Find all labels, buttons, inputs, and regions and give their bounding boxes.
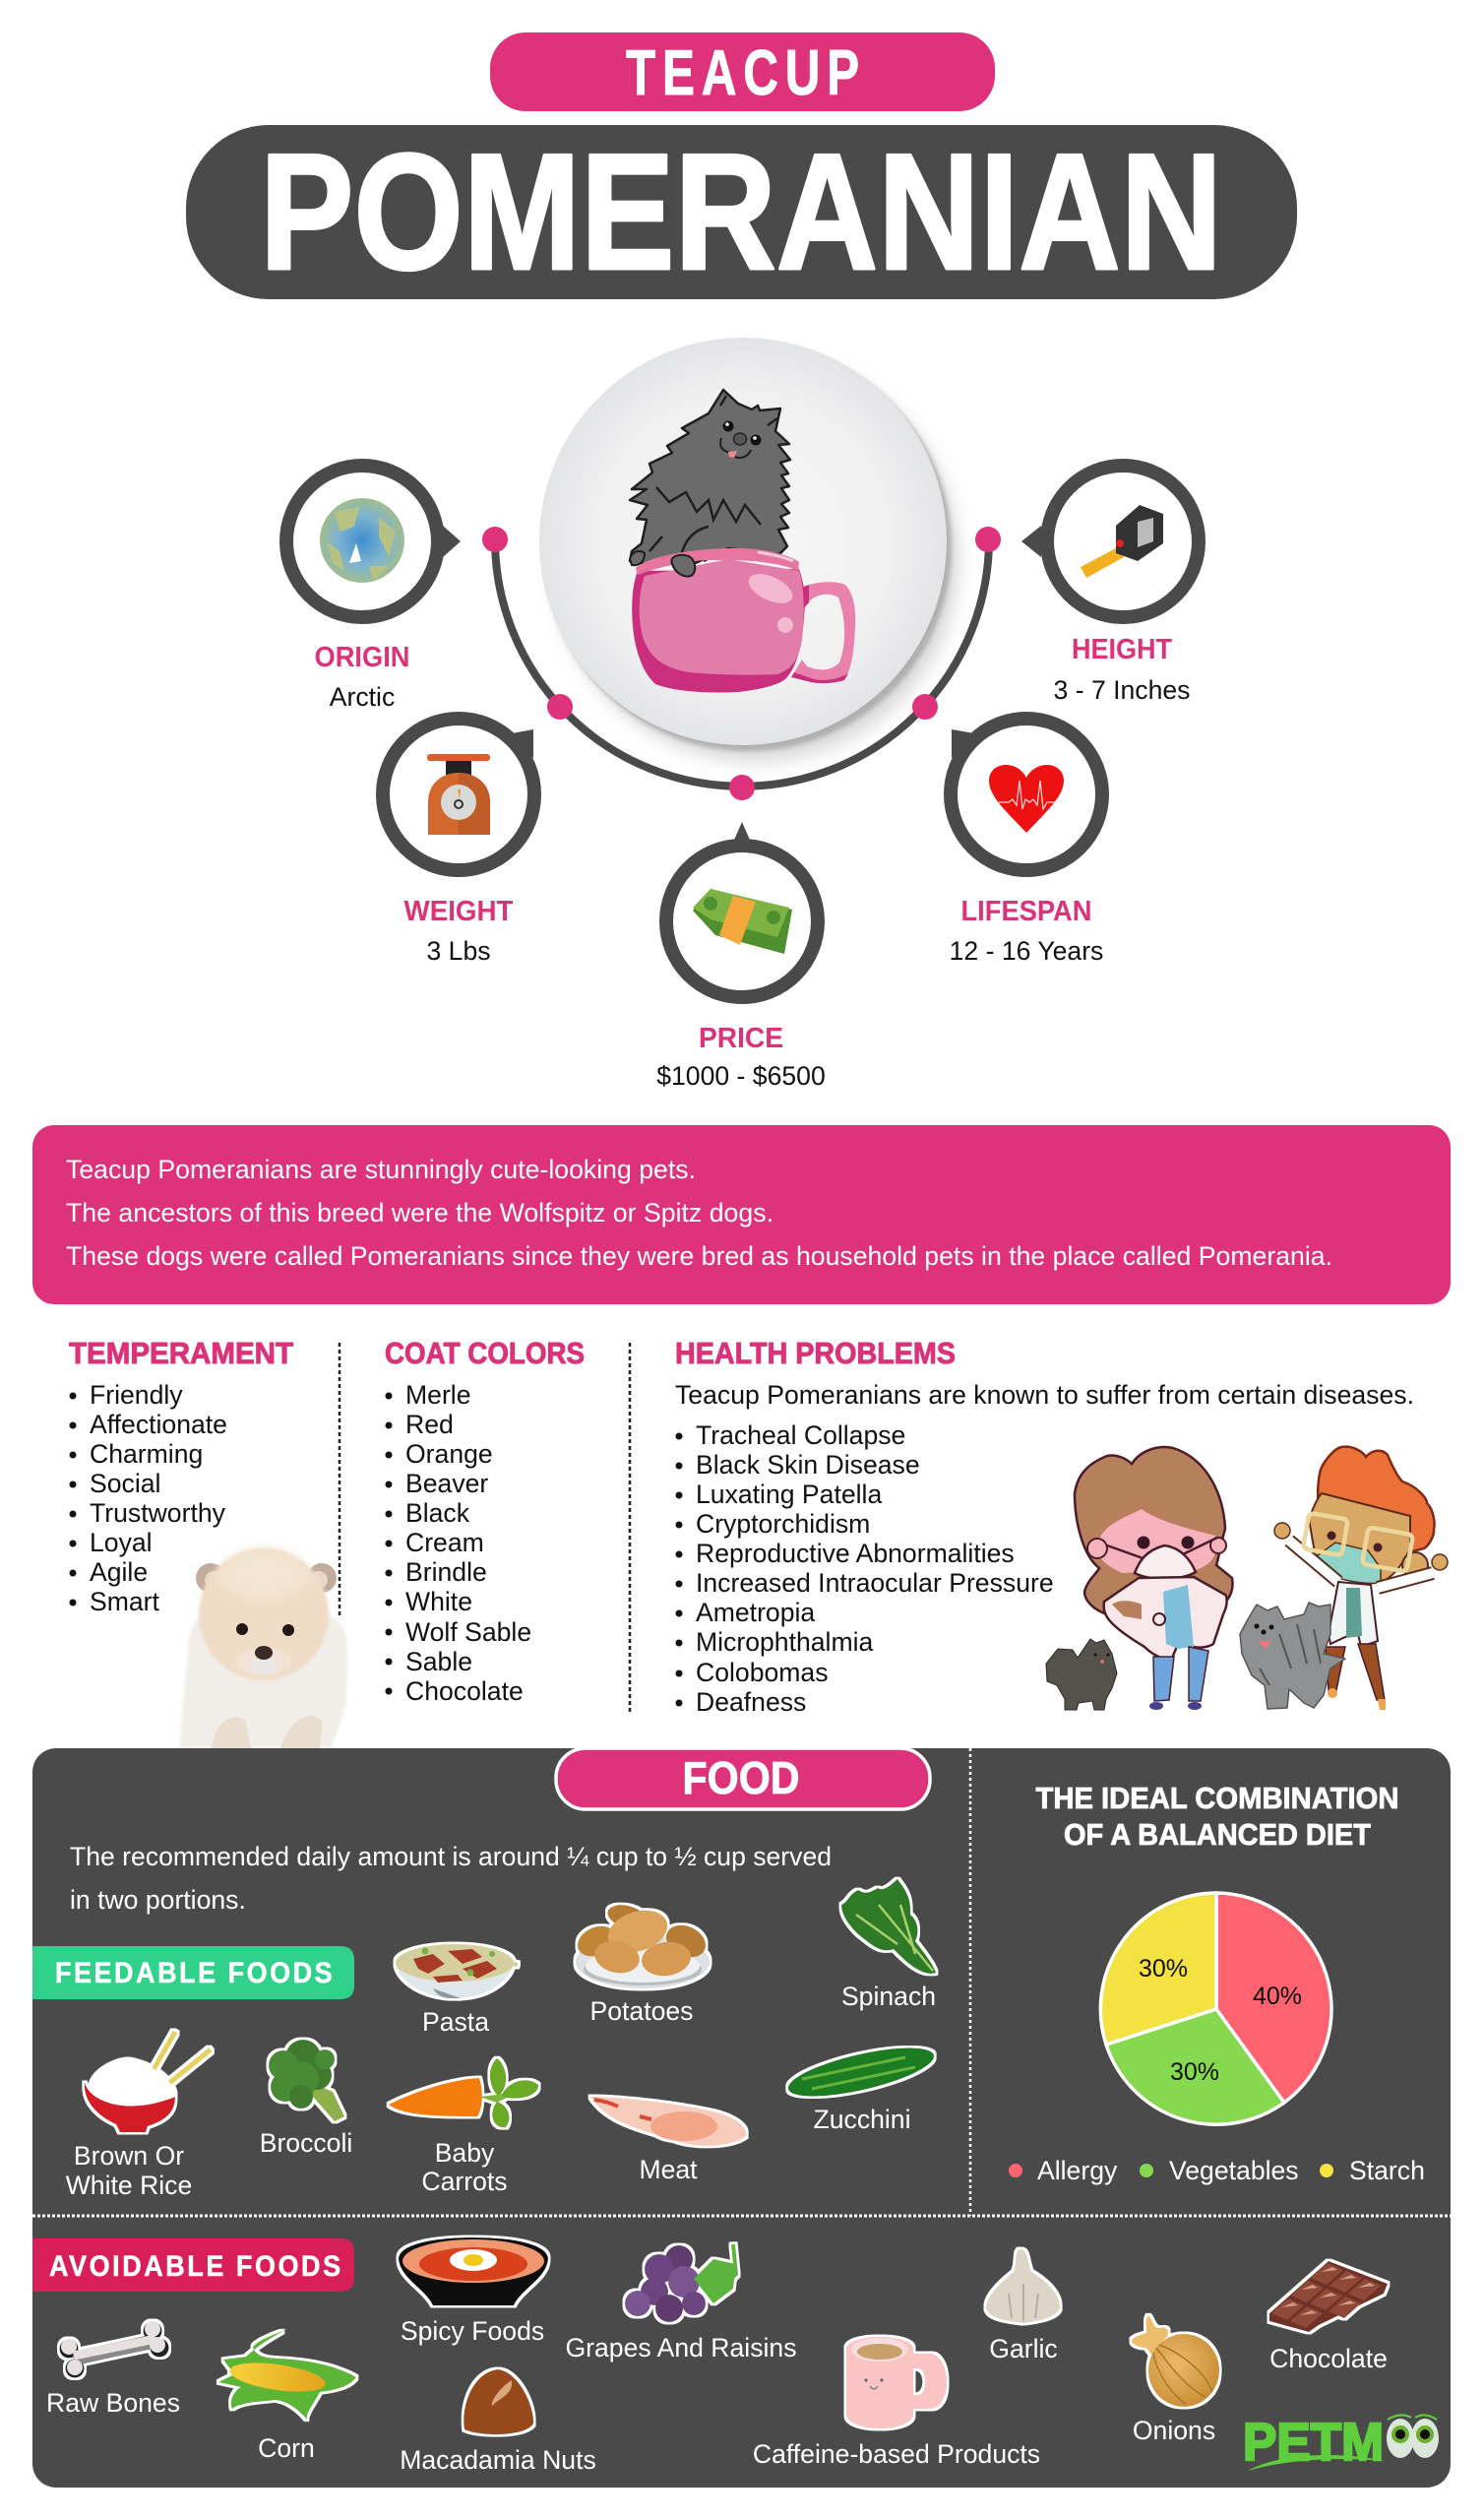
pie legend: Starch <box>1349 2156 1425 2185</box>
column: health problems: Reproductive Abnormalities <box>696 1539 1015 1568</box>
food: garlic: Garlic <box>989 2334 1058 2363</box>
food: spicy foods: Spicy Foods <box>401 2316 544 2346</box>
column: health problems: Cryptorchidism <box>696 1509 870 1539</box>
column: coat colors: Cream <box>405 1528 484 1557</box>
height label: HEIGHT <box>1072 634 1172 665</box>
food: macadamia nuts <box>400 2369 596 2475</box>
food: brown or white rice: White Rice <box>66 2171 192 2200</box>
food: chocolate <box>1269 2261 1388 2373</box>
food: spicy foods <box>399 2237 548 2346</box>
column: temperament: Friendly <box>90 1380 183 1410</box>
price label: $1000 - $6500 <box>656 1061 826 1091</box>
food: pasta <box>396 1944 518 2037</box>
column: coat colors: Red <box>405 1410 454 1439</box>
food: brown or white rice: Brown Or <box>74 2141 184 2171</box>
icon: black pomeranian <box>630 390 790 566</box>
food: grapes and raisins: Grapes And Raisins <box>565 2333 797 2362</box>
timeline arc with dots <box>482 527 1001 800</box>
illustration: dark small dog <box>1046 1639 1117 1710</box>
column: coat colors: Brindle <box>405 1557 487 1587</box>
food: baby carrots <box>389 2058 538 2196</box>
lifespan label: 12 - 16 Years <box>950 936 1103 966</box>
column: coat colors: Orange <box>405 1439 493 1469</box>
column: coat colors: Beaver <box>405 1469 488 1498</box>
food: potatoes: Potatoes <box>590 1996 693 2026</box>
price label <box>656 1023 826 1091</box>
intro banner: These dogs were called Pomeranians since they were bred as household pets in the place called Pomerania. <box>66 1241 1332 1271</box>
weight label: WEIGHT <box>403 896 514 927</box>
column: health problems: Increased Intraocular Pressure <box>696 1568 1054 1598</box>
origin label: ORIGIN <box>315 642 409 673</box>
food: caffeine-based products: Caffeine-based Products <box>753 2439 1040 2469</box>
food: caffeine-based products <box>753 2337 1040 2469</box>
food: grapes and raisins <box>565 2244 797 2362</box>
title: pomeranian: POMERANIAN <box>260 119 1222 304</box>
column: coat colors: COAT COLORS <box>385 1336 585 1370</box>
central disc with dog in teacup <box>539 338 958 762</box>
column: health problems: Luxating Patella <box>696 1480 882 1509</box>
column: health problems: Tracheal Collapse <box>696 1420 905 1450</box>
title: teacup <box>490 32 995 111</box>
logo: petmoo: PETM <box>1243 2413 1384 2472</box>
weight label: 3 Lbs <box>426 936 491 966</box>
food: zucchini <box>784 2038 938 2134</box>
column: temperament: Smart <box>90 1587 160 1616</box>
food: corn: Corn <box>258 2433 315 2463</box>
food: corn <box>218 2331 356 2463</box>
heading: food <box>556 1748 930 1809</box>
food: onions: Onions <box>1133 2416 1215 2445</box>
pie chart: 40% <box>1253 1983 1302 2010</box>
food: meat: Meat <box>639 2155 698 2184</box>
column: coat colors: Black <box>405 1498 470 1528</box>
food: brown or white rice <box>66 2032 211 2200</box>
heading: ideal combination: THE IDEAL COMBINATION <box>1035 1781 1399 1815</box>
label: avoidable foods: AVOIDABLE FOODS <box>49 2250 340 2283</box>
lifespan label: LIFESPAN <box>960 896 1092 927</box>
origin label <box>315 642 409 712</box>
heading: food: FOOD <box>683 1752 799 1803</box>
intro banner: The ancestors of this breed were the Wolfspitz or Spitz dogs. <box>66 1198 773 1228</box>
heading: ideal combination: OF A BALANCED DIET <box>1064 1817 1371 1852</box>
food: baby carrots: Baby <box>435 2138 495 2168</box>
column: temperament <box>69 1336 293 1616</box>
column: coat colors: Merle <box>405 1380 470 1410</box>
food: spinach <box>841 1879 936 2011</box>
food: garlic <box>986 2249 1060 2363</box>
column: health problems: Ametropia <box>696 1598 815 1627</box>
food: broccoli <box>260 2040 352 2158</box>
icon: teacup <box>630 548 855 692</box>
food: raw bones <box>46 2321 180 2418</box>
column: health problems: Teacup Pomeranians are known to suffer from certain diseases. <box>675 1380 1414 1410</box>
food: baby carrots: Carrots <box>421 2167 508 2196</box>
column: coat colors: Wolf Sable <box>405 1617 531 1647</box>
column: health problems: Microphthalmia <box>696 1627 874 1657</box>
column: temperament: Affectionate <box>90 1410 227 1439</box>
icon ring: weight scale <box>383 719 534 870</box>
intro banner <box>32 1125 1451 1304</box>
column: coat colors: Sable <box>405 1647 472 1676</box>
pie chart: 30% <box>1139 1955 1188 1983</box>
heading: ideal combination <box>1035 1781 1399 1852</box>
icon ring: height tape measure <box>1021 466 1199 617</box>
food: potatoes <box>573 1901 711 2026</box>
icon ring: lifespan heart <box>951 719 1102 870</box>
daily amount text: in two portions. <box>70 1885 246 1915</box>
icon ring: origin globe <box>286 466 461 617</box>
food: zucchini: Zucchini <box>813 2105 911 2134</box>
price label: PRICE <box>699 1023 783 1054</box>
pie legend: Allergy <box>1037 2156 1118 2185</box>
daily amount text: The recommended daily amount is around ¼ cup to ½ cup served <box>70 1842 832 1871</box>
label: feedable foods: FEEDABLE FOODS <box>55 1957 333 1989</box>
column: coat colors: White <box>405 1587 472 1616</box>
panel: food <box>32 1748 1451 2488</box>
food: macadamia nuts: Macadamia Nuts <box>400 2445 596 2475</box>
title: teacup: TEACUP <box>626 38 859 109</box>
label: avoidable foods <box>32 2238 354 2292</box>
column: temperament: TEMPERAMENT <box>69 1336 293 1370</box>
pie legend: Vegetables <box>1169 2156 1299 2185</box>
column: temperament: Charming <box>90 1439 203 1469</box>
weight label <box>403 896 514 966</box>
icon ring: price money <box>666 822 818 997</box>
label: feedable foods <box>32 1946 354 1999</box>
pie chart <box>1100 1893 1331 2124</box>
column: health problems: Deafness <box>696 1687 806 1717</box>
food: chocolate: Chocolate <box>1269 2344 1388 2373</box>
column: temperament: Loyal <box>90 1528 153 1557</box>
photo: cream puppy <box>180 1548 347 1748</box>
illustration: woman veterinarian <box>1075 1447 1233 1710</box>
intro banner: Teacup Pomeranians are stunningly cute-looking pets. <box>66 1155 696 1184</box>
food: meat <box>590 2097 746 2184</box>
food: onions <box>1132 2315 1219 2445</box>
column: health problems: Black Skin Disease <box>696 1450 920 1480</box>
column: health problems: Colobomas <box>696 1658 829 1687</box>
column: coat colors: Chocolate <box>405 1676 524 1706</box>
daily amount text <box>70 1842 832 1915</box>
illustration: grey dog <box>1240 1603 1345 1709</box>
column: temperament: Trustworthy <box>90 1498 226 1528</box>
food: pasta: Pasta <box>422 2007 489 2037</box>
illustration: male veterinarian <box>1274 1447 1448 1710</box>
height label: 3 - 7 Inches <box>1054 675 1190 705</box>
column: health problems: HEALTH PROBLEMS <box>675 1336 956 1370</box>
column: temperament: Agile <box>90 1557 148 1587</box>
column: temperament: Social <box>90 1469 160 1498</box>
pie legend <box>1009 2156 1425 2185</box>
food: spinach: Spinach <box>841 1982 936 2011</box>
pie chart: 30% <box>1170 2058 1219 2086</box>
lifespan label <box>950 896 1103 966</box>
column: coat colors <box>385 1336 585 1706</box>
origin label: Arctic <box>330 682 395 712</box>
food: raw bones: Raw Bones <box>46 2388 180 2418</box>
height label <box>1054 634 1190 705</box>
food: broccoli: Broccoli <box>260 2128 352 2158</box>
column: health problems <box>675 1336 1414 1717</box>
